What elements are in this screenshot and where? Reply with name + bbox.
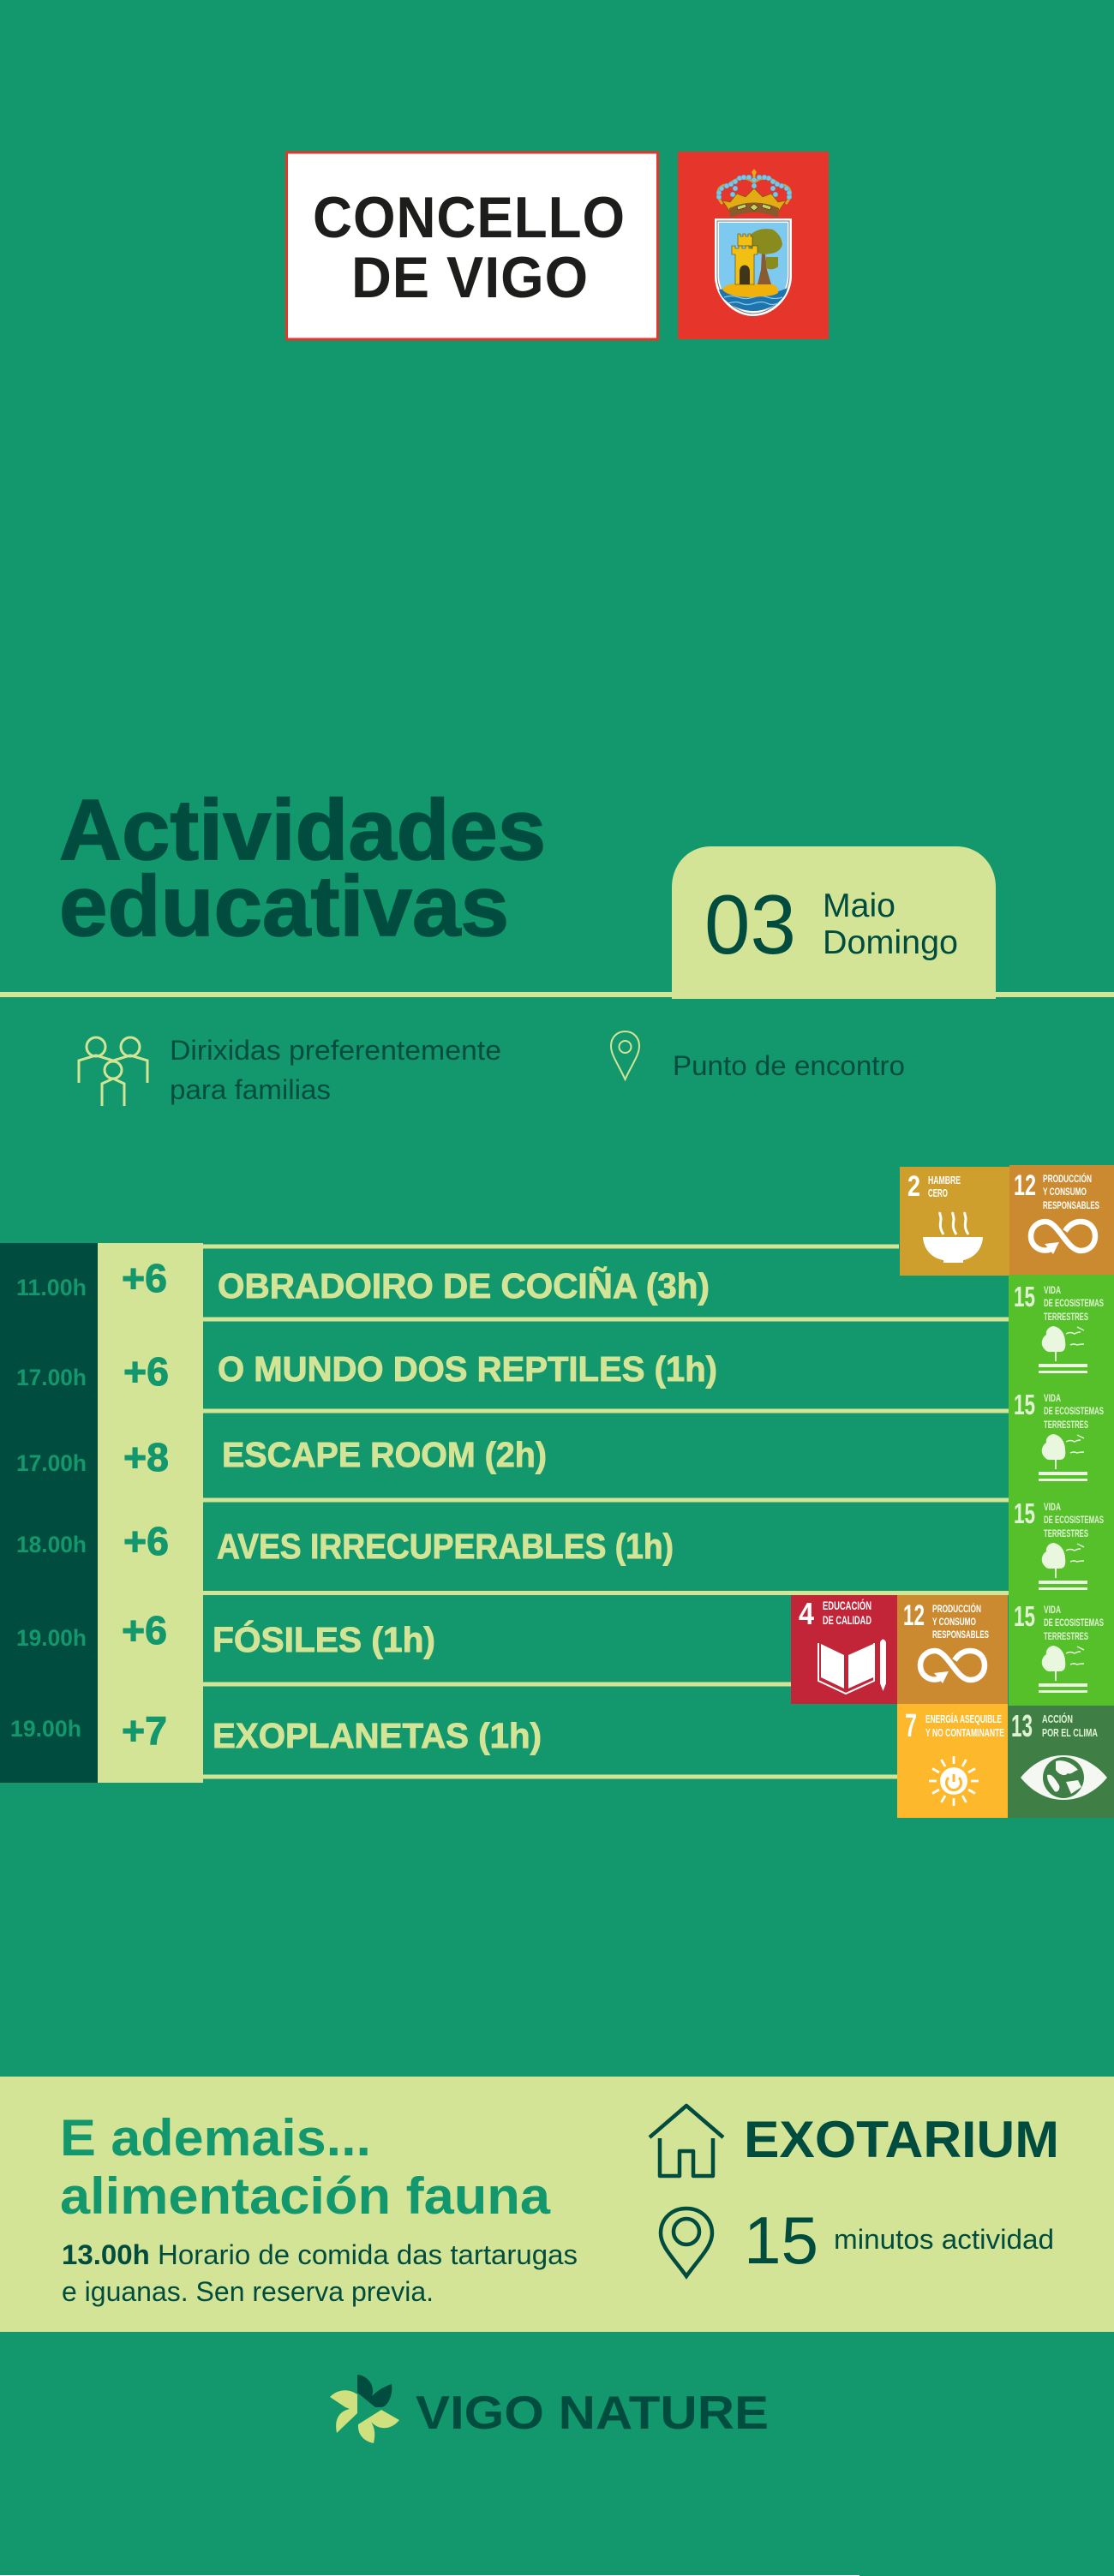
SDG tile 2: hambre cero: [900, 1167, 1009, 1276]
band description: [62, 2239, 578, 2307]
SDG tile 7: energia asequible: [897, 1704, 1008, 1818]
age column: [98, 1243, 203, 1783]
duration: 15: [744, 2202, 818, 2278]
SDG tile 15 (row 5): 15: [1014, 1600, 1035, 1632]
band: E ademais: [0, 2077, 1114, 2332]
age column: +7: [122, 1708, 167, 1753]
age column: +6: [123, 1519, 169, 1563]
age column: +6: [123, 1349, 169, 1394]
time column: 11.00h: [16, 1275, 87, 1300]
header divider line: [0, 992, 1114, 997]
logo: Concello de Vigo: [286, 152, 829, 339]
icon: family: [79, 1037, 147, 1106]
band heading: alimentación fauna: [60, 2167, 551, 2225]
SDG tile 15 (row 3): 15: [1014, 1389, 1035, 1420]
title: Actividades: [59, 782, 546, 878]
activity names: EXOPLANETAS (1h): [213, 1716, 542, 1755]
SDG tile 15 (row 2): TERRESTRES: [1044, 1311, 1088, 1323]
date card: Domingo: [823, 924, 958, 961]
age column: +8: [123, 1435, 169, 1479]
activity names: AVES IRRECUPERABLES (1h): [217, 1527, 674, 1566]
SDG tile 4: educacion de calidad: 4: [799, 1596, 814, 1631]
bottom edge line: [0, 2575, 859, 2576]
icon: coat of arms on red: [678, 152, 829, 339]
logo wordmark box: DE VIGO: [351, 245, 589, 310]
activity names: FÓSILES (1h): [213, 1620, 435, 1659]
SDG tile 13: accion por el clima: 13: [1011, 1708, 1033, 1743]
SDG tile 12: produccion y consumo (top): Y CONSUMO: [1043, 1186, 1087, 1198]
SDG tile 15 (row 5): [1014, 1600, 1104, 1693]
venue name: EXOTARIUM: [744, 2111, 1059, 2168]
activity names: O MUNDO DOS REPTILES (1h): [218, 1349, 717, 1389]
logo wordmark box: CONCELLO: [313, 185, 626, 250]
icon: leaf pinwheel: [330, 2375, 399, 2443]
SDG tile 15 (row 3): TERRESTRES: [1044, 1419, 1088, 1431]
SDG tile 15 (row 4): [1014, 1497, 1104, 1590]
band description: e iguanas. Sen reserva previa.: [62, 2276, 434, 2307]
activity names: OBRADOIRO DE COCIÑA (3h): [218, 1266, 710, 1306]
icon: location pin: [611, 1031, 639, 1079]
SDG tile 12: produccion y consumo (lower): PRODUCCIÓN: [932, 1602, 981, 1615]
SDG tile 15 (row 3): [1014, 1389, 1104, 1481]
SDG tile 12: produccion y consumo (lower): [897, 1595, 1008, 1704]
SDG tile 4: educacion de calidad: EDUCACIÓN: [823, 1598, 871, 1612]
audience text: Dirixidas preferentemente: [170, 1035, 501, 1066]
time column: 19.00h: [10, 1716, 81, 1742]
SDG tile 15 (row 2): 15: [1014, 1281, 1035, 1312]
SDG tile 15 (row 4): 15: [1014, 1497, 1035, 1529]
SDG tile 12: produccion y consumo (top): PRODUCCIÓN: [1043, 1172, 1092, 1185]
duration: [744, 2202, 1054, 2278]
SDG tile 12: produccion y consumo (top): [1009, 1165, 1114, 1275]
time column: 17.00h: [16, 1450, 87, 1476]
activity names: [213, 1266, 717, 1755]
SDG tile 13: accion por el clima: ACCIÓN: [1042, 1712, 1073, 1725]
time column: 18.00h: [16, 1532, 87, 1557]
title: [59, 782, 546, 954]
SDG tile 15 (row 2): VIDA: [1044, 1284, 1061, 1296]
title: educativas: [59, 858, 509, 954]
audience text: para familias: [170, 1074, 331, 1105]
schedule table: [0, 1243, 1009, 1783]
SDG tile 7: energia asequible: Y NO CONTAMINANTE: [925, 1726, 1004, 1739]
age column: +6: [122, 1608, 167, 1653]
band description: 13.00h Horario de comida das tartarugas: [62, 2239, 578, 2270]
SDG tile 15 (row 2): [1014, 1281, 1104, 1373]
SDG tile 7: energia asequible: 7: [905, 1708, 917, 1744]
SDG column: 15 vida de ecosistemas terrestres: [1009, 1275, 1114, 1706]
SDG tile 7: energia asequible: ENERGÍA ASEQUIBLE: [925, 1712, 1002, 1725]
SDG tile 15 (row 4): VIDA: [1044, 1501, 1061, 1513]
SDG tile 13: accion por el clima: [1008, 1706, 1114, 1818]
SDG tile 4: educacion de calidad: DE CALIDAD: [823, 1613, 871, 1627]
icon: pin: [661, 2208, 712, 2276]
duration: minutos actividad: [834, 2224, 1054, 2255]
meeting point text: Punto de encontro: [673, 1050, 905, 1081]
band heading: E ademais...: [60, 2109, 371, 2167]
SDG tile 2: hambre cero: HAMBRE: [928, 1174, 961, 1186]
SDG tile 15 (row 4): TERRESTRES: [1044, 1527, 1088, 1539]
time column: [0, 1243, 98, 1783]
date card: [672, 846, 996, 999]
activity names: ESCAPE ROOM (2h): [222, 1435, 547, 1474]
time column: 17.00h: [16, 1365, 87, 1390]
date card: 03: [704, 877, 796, 971]
age column: +6: [122, 1256, 167, 1300]
SDG tile 12: produccion y consumo (lower): RESPONSABLES: [932, 1629, 989, 1641]
SDG tile 12: produccion y consumo (top): 12: [1014, 1169, 1036, 1202]
SDG tile 15 (row 5): TERRESTRES: [1044, 1630, 1088, 1642]
icon: house: [650, 2106, 723, 2176]
wordmark: VIGO NATURE: [416, 2386, 769, 2439]
audience text: [170, 1035, 501, 1105]
logo: Vigo Nature: [330, 2375, 769, 2443]
SDG tile 4: educacion de calidad: [791, 1595, 897, 1704]
SDG tile 15 (row 5): VIDA: [1044, 1604, 1061, 1616]
date card: Maio: [823, 888, 895, 924]
band heading: [60, 2109, 551, 2225]
SDG tile 12: produccion y consumo (lower): Y CONSUMO: [932, 1616, 976, 1628]
SDG tile 12: produccion y consumo (lower): 12: [903, 1599, 925, 1632]
row divider lines: [203, 1246, 1009, 1777]
SDG tile 2: hambre cero: 2: [907, 1170, 920, 1203]
SDG tile 2: hambre cero: CERO: [928, 1186, 948, 1199]
SDG tile 15 (row 3): VIDA: [1044, 1392, 1061, 1404]
time column: 19.00h: [16, 1625, 87, 1651]
logo wordmark box: [286, 152, 658, 339]
